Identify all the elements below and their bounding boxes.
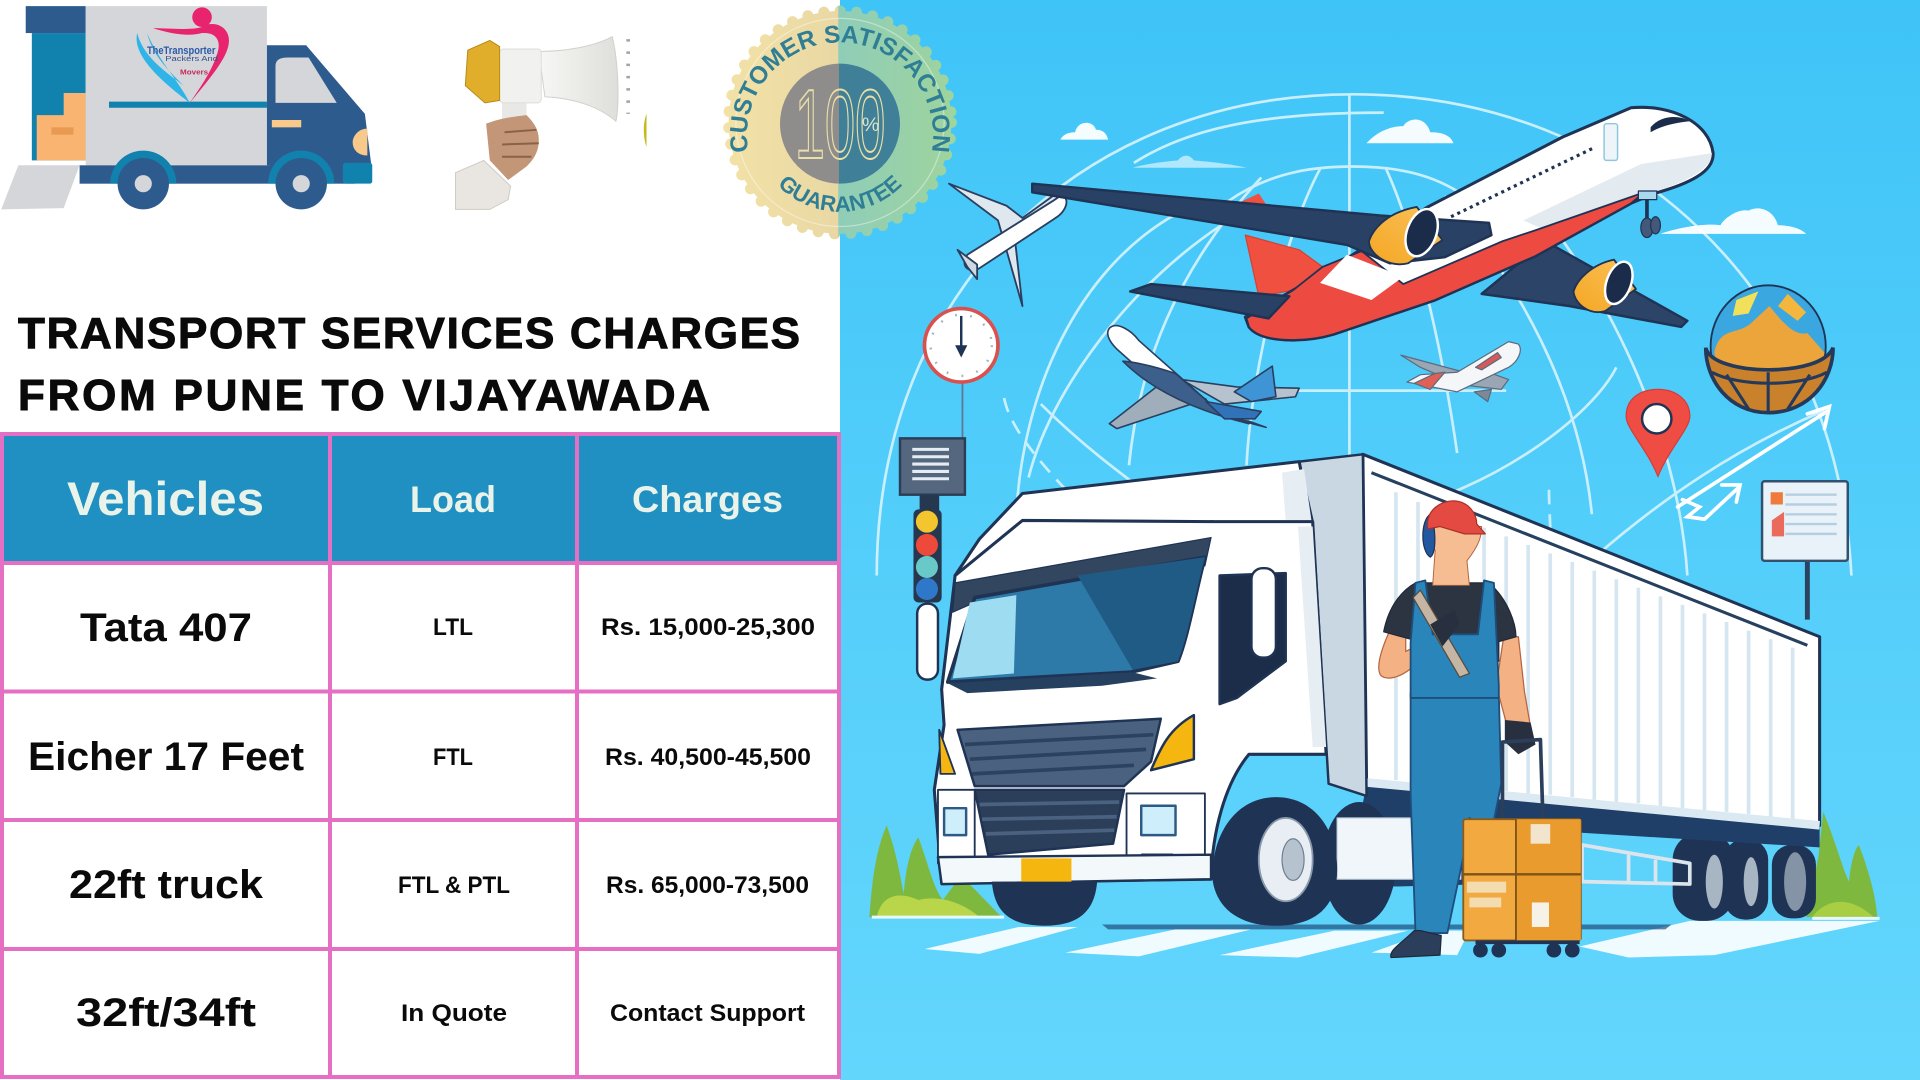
megaphone icon bbox=[456, 37, 647, 209]
location pin bbox=[1626, 389, 1690, 476]
overall bib bbox=[1411, 580, 1499, 698]
small red plane bbox=[1401, 342, 1520, 402]
red belly bbox=[1247, 192, 1645, 340]
row: 32ft/34ft bbox=[76, 991, 805, 1035]
row: Eicher 17 Feet bbox=[28, 735, 811, 779]
row: Tata 407: Rs. 15,000-25,300 bbox=[601, 614, 815, 641]
suitcase wheels bbox=[1473, 940, 1580, 958]
header row: Vehicles bbox=[67, 472, 264, 525]
legs bbox=[1411, 693, 1501, 933]
headset bbox=[1423, 514, 1435, 557]
row: Tata 407 bbox=[80, 606, 815, 650]
badge disc bbox=[729, 11, 951, 234]
truck cargo bbox=[32, 33, 86, 160]
title bbox=[18, 309, 800, 420]
box label bbox=[51, 127, 73, 135]
sleeve bbox=[456, 160, 511, 209]
main airplane bbox=[1032, 107, 1713, 340]
horn cap bbox=[465, 40, 500, 103]
tool in hand bbox=[1413, 590, 1469, 677]
far wing bbox=[1482, 241, 1687, 327]
100 numerals: 100 bbox=[795, 69, 885, 179]
yellow lamp right bbox=[1151, 715, 1194, 770]
grass right bbox=[1806, 812, 1877, 917]
satisfaction text: CUSTOMER SATISFACTION bbox=[730, 26, 950, 152]
title: FROM PUNE TO VIJAYAWADA bbox=[18, 371, 710, 420]
rear right wheel pair bbox=[1322, 802, 1396, 924]
trailer side bbox=[1363, 454, 1820, 825]
olive arc bbox=[644, 114, 647, 147]
company logo bbox=[137, 7, 229, 103]
shirt bbox=[1384, 583, 1516, 661]
cab body bbox=[934, 520, 1326, 883]
trailer front panel bbox=[1299, 454, 1367, 796]
row: Tata 407: Tata 407 bbox=[80, 606, 252, 650]
clouds bbox=[1060, 119, 1806, 234]
row: 22ft truck: FTL & PTL bbox=[398, 872, 510, 899]
bumper bbox=[343, 163, 372, 184]
company logo: TheTransporter bbox=[147, 45, 216, 57]
white tail patch bbox=[1320, 255, 1403, 300]
windshield bbox=[948, 557, 1205, 682]
left mirror bbox=[917, 604, 938, 680]
engine one bbox=[1369, 205, 1444, 264]
suitcase bbox=[1463, 819, 1581, 940]
tail fin top bbox=[1238, 193, 1269, 208]
suitcase handle bbox=[1502, 740, 1543, 818]
glove bbox=[1505, 720, 1536, 754]
rear wheel bbox=[110, 151, 176, 209]
upper grille bbox=[958, 719, 1161, 786]
side guard bbox=[1582, 845, 1690, 884]
row: 22ft truck bbox=[69, 863, 809, 907]
row: 32ft/34ft: In Quote bbox=[401, 1000, 507, 1027]
inner ring line bbox=[736, 18, 944, 227]
boxes bbox=[37, 93, 86, 160]
cab window bbox=[276, 58, 337, 103]
lower grille bbox=[975, 790, 1124, 855]
front wheel bbox=[268, 151, 334, 209]
globe grid lines bbox=[877, 94, 1851, 771]
bumper bbox=[938, 855, 1211, 884]
right headlight bbox=[1127, 793, 1205, 866]
row: 32ft/34ft: 32ft/34ft bbox=[76, 991, 256, 1035]
globe in basket bbox=[1706, 285, 1833, 413]
row: Tata 407: LTL bbox=[433, 614, 473, 641]
side stripe bbox=[109, 102, 267, 108]
stabilizer bbox=[1130, 284, 1289, 318]
number plate bbox=[1021, 858, 1071, 883]
panel: illustration sky bbox=[840, 0, 1920, 1080]
worker bbox=[1379, 501, 1581, 958]
windshield reflection bbox=[1078, 557, 1205, 670]
small blue plane bbox=[1108, 326, 1299, 429]
header row bbox=[67, 472, 783, 525]
table grid bbox=[2, 434, 839, 1077]
handle bbox=[502, 98, 527, 120]
horn body bbox=[500, 49, 541, 103]
table body background bbox=[2, 563, 839, 1077]
windows bbox=[1451, 148, 1593, 217]
header row: Load bbox=[410, 479, 496, 520]
chassis under trailer bbox=[1347, 784, 1820, 888]
tail fin bbox=[1245, 235, 1326, 296]
growth arrow bbox=[1678, 407, 1829, 519]
engine two bbox=[1573, 258, 1638, 312]
trailer lower rail bbox=[1367, 782, 1820, 825]
clock bbox=[924, 309, 998, 465]
right arm bbox=[1496, 637, 1531, 727]
trailer ribs bbox=[1396, 492, 1793, 819]
guarantee badge bbox=[723, 6, 957, 240]
cockpit bbox=[1651, 117, 1690, 132]
chassis bbox=[80, 165, 355, 184]
door handle bbox=[272, 120, 301, 127]
shoe bbox=[1391, 931, 1441, 958]
row: Eicher 17 Feet: Rs. 40,500-45,500 bbox=[605, 744, 811, 771]
truck cab bbox=[267, 45, 371, 171]
door bbox=[1604, 124, 1618, 160]
door mirror bbox=[1251, 568, 1276, 658]
rear wheels bbox=[1673, 833, 1816, 921]
delivery truck logo illustration bbox=[1, 6, 372, 209]
centre disc bbox=[780, 64, 900, 184]
yellow lamp left bbox=[939, 730, 955, 774]
info sign bbox=[1762, 481, 1848, 620]
front right wheel bbox=[1212, 797, 1337, 926]
grass left bbox=[869, 825, 1002, 917]
scallops bbox=[729, 11, 951, 234]
row: 22ft truck: 22ft truck bbox=[69, 863, 264, 907]
sun visor bbox=[953, 538, 1211, 612]
signal box bbox=[900, 438, 965, 495]
table header background bbox=[2, 434, 839, 563]
table: vehicle charges bbox=[2, 434, 839, 1077]
truck box bbox=[86, 6, 267, 165]
side window bbox=[1220, 573, 1286, 704]
windshield glare bbox=[953, 595, 1016, 678]
upper grille bars bbox=[965, 735, 1153, 774]
small plane upper left bbox=[949, 184, 1067, 306]
fuselage shading bbox=[1523, 153, 1712, 229]
road markings bbox=[872, 917, 1880, 958]
company logo: Packers And bbox=[165, 54, 218, 63]
guarantee text: GUARANTEE bbox=[780, 174, 902, 212]
near wing bbox=[1032, 184, 1491, 263]
truck ramp bbox=[1, 165, 80, 209]
trailer roof rail bbox=[1371, 473, 1807, 645]
header row: Charges bbox=[632, 479, 783, 520]
cab fairing shade bbox=[1282, 469, 1313, 529]
row: 22ft truck: Rs. 65,000-73,500 bbox=[606, 872, 809, 899]
row: Eicher 17 Feet: FTL bbox=[433, 744, 473, 771]
cab side shading bbox=[1298, 527, 1326, 747]
row: Eicher 17 Feet: Eicher 17 Feet bbox=[28, 735, 304, 779]
lower grille bars bbox=[980, 802, 1119, 834]
fuselage bbox=[1245, 107, 1713, 340]
cargo top bbox=[26, 6, 86, 33]
title: TRANSPORT SERVICES CHARGES bbox=[18, 309, 800, 358]
truck bbox=[917, 454, 1820, 926]
headlamp bbox=[353, 129, 367, 156]
side tank bbox=[1337, 818, 1461, 879]
percent: % bbox=[862, 114, 879, 136]
neck and head bbox=[1428, 527, 1482, 585]
left arm bbox=[1379, 602, 1445, 678]
cap bbox=[1428, 501, 1485, 534]
hand bbox=[486, 115, 539, 180]
horn bbox=[539, 37, 618, 121]
company logo: Movers bbox=[180, 68, 208, 77]
wipers bbox=[948, 672, 1157, 693]
landing gear bbox=[1638, 191, 1660, 238]
front left wheel bbox=[992, 882, 1097, 926]
left headlight bbox=[938, 790, 975, 868]
traffic light bbox=[913, 495, 942, 602]
sound dots bbox=[627, 39, 630, 114]
cab roof fairing bbox=[955, 462, 1313, 576]
row: 32ft/34ft: Contact Support bbox=[610, 1000, 805, 1027]
